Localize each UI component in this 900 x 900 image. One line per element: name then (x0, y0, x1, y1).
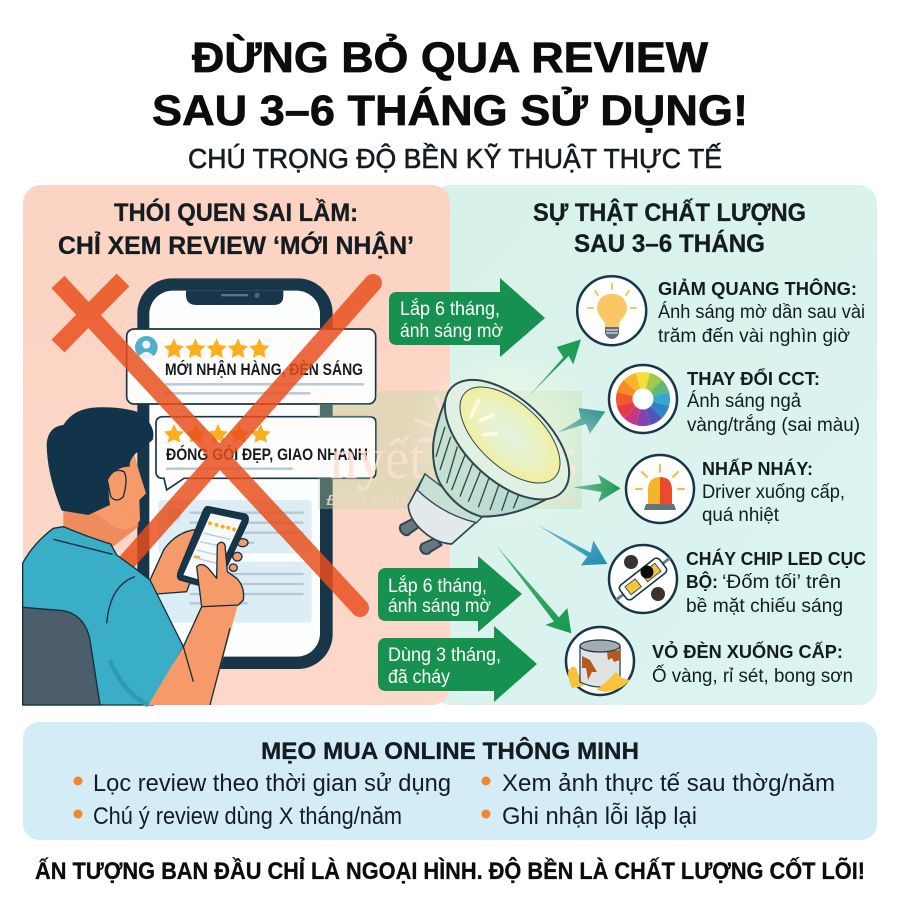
arrow label: used 3 months: đã cháy (388, 667, 450, 688)
glow behind bulb (405, 345, 605, 535)
subtitle: CHÚ TRỌNG ĐỘ BỀN KỸ THUẬT THỰC TẾ (188, 143, 722, 174)
title: ĐỪNG BỎ QUA REVIEW (192, 33, 708, 82)
text block: flicker (702, 458, 845, 526)
arrow label: used 3 months: Dùng 3 tháng, (388, 645, 501, 666)
illustration: phone with reviews (127, 278, 376, 669)
base (408, 474, 482, 544)
tip 4: Ghi nhận lỗi lặp lại (502, 803, 697, 830)
left hand fingers (229, 539, 248, 571)
arm (148, 603, 238, 705)
rim (424, 358, 590, 521)
text block: burnt chip (686, 548, 866, 617)
illustration: person holding phone (23, 407, 248, 705)
text block: lumen loss: trăm đến vài nghìn giờ (658, 326, 850, 347)
handheld phone (177, 507, 248, 589)
tip 1: Lọc review theo thời gian sử dụng (93, 770, 451, 797)
text block: CCT shift: THAY ĐỔI CCT: (687, 368, 820, 389)
text block: CCT shift (687, 368, 860, 436)
text block: burnt chip: CHÁY CHIP LED CỤC (686, 548, 866, 569)
text block: burnt chip: ‘Đốm tối’ trên (722, 572, 841, 593)
arrow label: used 3 months (378, 626, 537, 702)
pins (400, 518, 442, 554)
text block: housing: Ố vàng, rỉ sét, bong sơn (652, 665, 853, 687)
arrow label: installed 6 months top: Lắp 6 tháng, (400, 298, 500, 320)
arrow to burnt chip (538, 525, 607, 565)
text block: CCT shift: Ánh sáng ngả (687, 391, 801, 412)
watermark (318, 391, 582, 509)
lens highlights (471, 401, 497, 435)
heading: right panel (533, 197, 806, 258)
heading: right panel: SAU 3–6 THÁNG (574, 229, 765, 258)
arrow to lumen loss (528, 339, 581, 397)
tips heading: MẸO MUA ONLINE THÔNG MINH (261, 737, 639, 765)
watermark: nyết Lights (330, 426, 578, 491)
small arrows from bulb (497, 339, 621, 633)
ear (107, 470, 126, 500)
arrow to flicker (573, 475, 621, 502)
shirt (23, 527, 183, 705)
arrow label: installed 6 months top (389, 278, 545, 357)
review card 2 (156, 417, 376, 490)
review text 2: ĐÓNG GÓI ĐẸP, GIAO NHANH (166, 445, 368, 464)
icon: light bulb (577, 276, 646, 345)
text block: lumen loss: Ánh sáng mờ dần sau vài (658, 302, 865, 323)
screen review lists (158, 500, 312, 623)
neck (63, 483, 138, 547)
panel: right truth background (432, 185, 877, 705)
text block: CCT shift: vàng/trắng (sai màu) (687, 414, 860, 436)
text block: burnt chip: bề mặt chiếu sáng (686, 596, 843, 617)
fingers (197, 542, 244, 607)
chair (23, 607, 100, 705)
heading: right panel: SỰ THẬT CHẤT LƯỢNG (533, 197, 806, 227)
review text 1: MỚI NHẬN HÀNG, ĐÈN SÁNG (165, 360, 363, 379)
face (90, 452, 146, 529)
text block: flicker: quá nhiệt (702, 505, 780, 526)
big red X (58, 280, 373, 608)
lens (443, 370, 577, 500)
arrow label: installed 6 months lower (378, 556, 522, 632)
arrow to CCT (558, 408, 605, 434)
arrow to housing (497, 546, 571, 633)
heading: left panel: THÓI QUEN SAI LẦM: (114, 197, 358, 227)
heading: left panel: CHỈ XEM REVIEW ‘MỚI NHẬN’ (58, 230, 414, 260)
arrow label: installed 6 months lower: ánh sáng mờ (388, 596, 491, 617)
heading: left panel (58, 197, 414, 260)
tip 2: Chú ý review dùng X tháng/năm (93, 803, 402, 830)
watermark: Đèn chuẩn - Kỹ thuật chất (326, 492, 579, 509)
text block: flicker: NHẤP NHÁY: (702, 458, 813, 479)
panel: left mistake background (23, 185, 450, 705)
arrow label: installed 6 months lower: Lắp 6 tháng, (388, 575, 487, 597)
tip 3: Xem ảnh thực tế sau thờg/năm (502, 770, 835, 797)
icon: GU10 LED bulb (400, 358, 590, 554)
icon: degraded housing (566, 627, 634, 695)
panel: online buying tips (23, 722, 877, 840)
text block: lumen loss (658, 278, 865, 347)
text block: housing: VỎ ĐÈN XUỐNG CẤP: (652, 641, 843, 662)
title (152, 33, 748, 135)
review card 1 (127, 329, 376, 404)
icon: warning beacon (626, 455, 694, 523)
icon: burnt LED chip (609, 545, 677, 613)
text block: housing (652, 641, 853, 687)
left hand (150, 529, 207, 594)
phone body (137, 278, 333, 669)
arrow label: installed 6 months top: ánh sáng mờ (400, 321, 503, 342)
ribs (436, 427, 520, 511)
title: SAU 3–6 THÁNG SỬ DỤNG! (152, 86, 748, 135)
icon: colour wheel (609, 365, 677, 433)
cone (433, 398, 545, 517)
text block: lumen loss: GIẢM QUANG THÔNG: (658, 278, 857, 299)
text block: burnt chip: BỘ: (686, 571, 718, 592)
hair (47, 407, 153, 515)
text block: flicker: Driver xuống cấp, (702, 482, 845, 503)
